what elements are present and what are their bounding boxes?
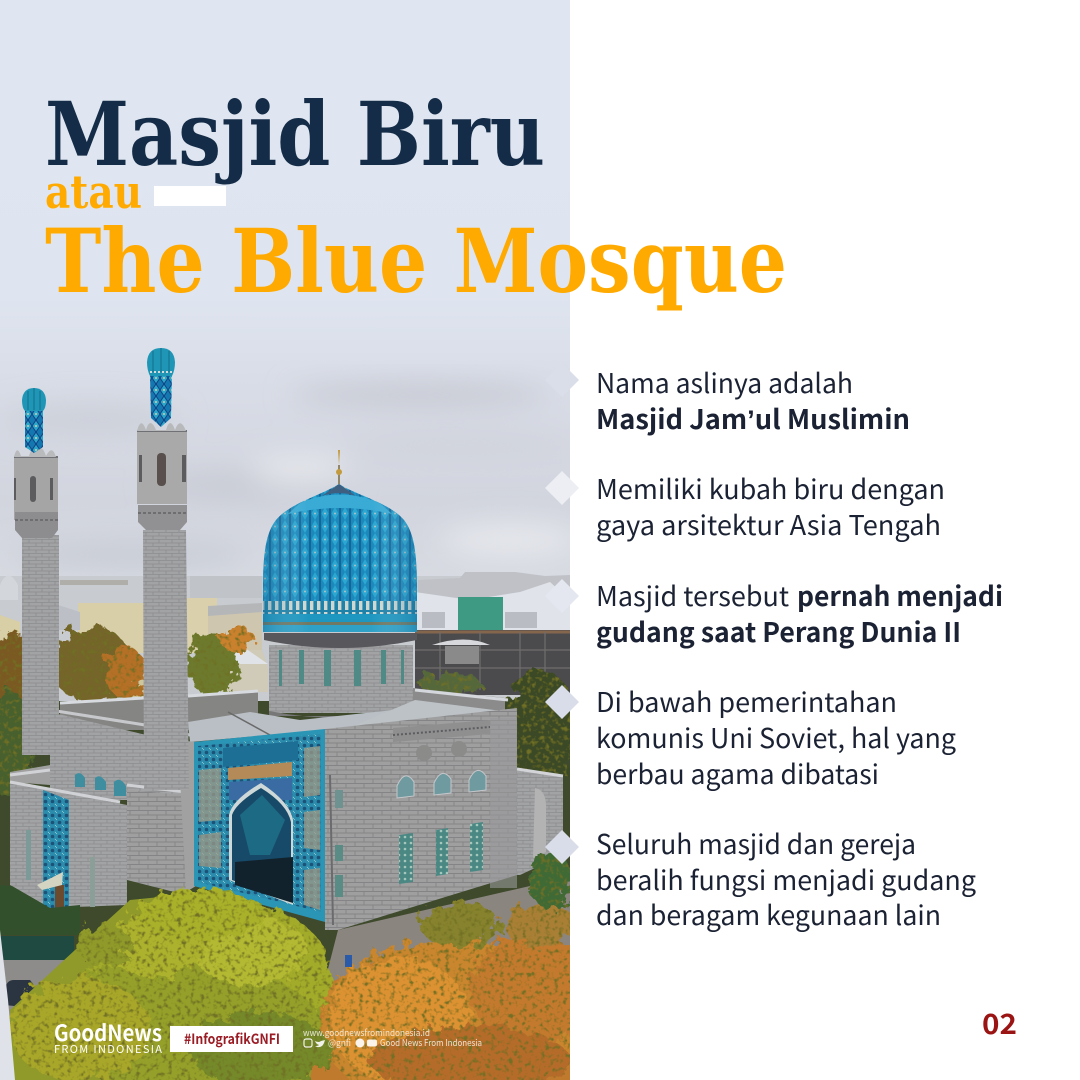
text block: point 3: Masjid tersebut: [596, 575, 789, 614]
right facade: [325, 708, 563, 930]
minaret left: [14, 388, 59, 755]
foliage: yellow-green tree: [10, 889, 332, 1080]
text block: point 1: Nama aslinya adalah: [596, 362, 853, 401]
white highlight block: [154, 186, 226, 206]
left wing of the mosque: [10, 765, 127, 922]
text block: point 2: Memiliki kubah biru dengan: [596, 468, 945, 507]
street light pole: [0, 930, 15, 1080]
text block: point 2: gaya arsitektur Asia Tengah: [596, 504, 941, 543]
hashtag badge: #InfografikGNFI: [184, 1029, 280, 1049]
heading: atau: atau: [45, 165, 142, 219]
text block: point 4: Di bawah pemerintahan: [596, 681, 897, 720]
icon: instagram: [304, 1039, 312, 1047]
dark ground base behind the building: [0, 701, 570, 968]
page number: 02: [982, 1003, 1017, 1043]
text block: point 5: [596, 823, 976, 933]
title: [45, 82, 787, 313]
footer website and social links: www.goodnewsfromindonesia.id: [303, 1026, 430, 1039]
street and pavement: [0, 882, 570, 1022]
back roof of mosque: [60, 688, 508, 730]
footer website and social links: @gnfi: [328, 1036, 351, 1049]
icon: youtube: [367, 1040, 377, 1046]
upper walls and metal roof: [50, 700, 516, 800]
text block: point 3: [596, 575, 1003, 650]
panel: mosque photo: [0, 0, 590, 1080]
footer logo: GoodNews: FROM INDONESIA: [54, 1041, 162, 1057]
tiled main portal: [194, 729, 325, 922]
minaret right: [137, 348, 189, 790]
text block: point 2: [596, 468, 945, 543]
city skyline: [0, 572, 570, 701]
text block: point 4: komunis Uni Soviet, hal yang: [596, 717, 956, 756]
bullet diamonds: [545, 363, 579, 864]
text block: point 1: [596, 362, 910, 437]
text block: point 1: Masjid Jam’ul Muslimin: [596, 398, 910, 437]
foliage: orange tree: [320, 852, 590, 1080]
diamond 2: [545, 471, 579, 505]
hashtag badge: [170, 1026, 293, 1052]
pedestrian sign: [345, 955, 352, 967]
text block: point 4: berbau agama dibatasi: [596, 753, 879, 792]
text block: point 3: pernah menjadi: [797, 575, 1003, 614]
stone tower block: [127, 740, 196, 895]
diamond 4: [545, 685, 579, 719]
icon: facebook: [356, 1038, 364, 1048]
background trees: [0, 627, 578, 800]
text block: point 3: gudang saat Perang Dunia II: [596, 611, 961, 650]
text block: point 4: [596, 681, 956, 792]
diamond 3: [545, 579, 579, 613]
sky: [0, 0, 580, 590]
diamond 5: [545, 830, 579, 864]
heading: Masjid Biru: Masjid Biru: [45, 82, 545, 186]
icon: twitter: [315, 1040, 325, 1047]
footer website and social links: [303, 1026, 482, 1049]
text block: point 5: dan beragam kegunaan lain: [596, 894, 941, 933]
footer website and social links: Good News From Indonesia: [380, 1036, 482, 1049]
foliage: base fill: [10, 890, 570, 1080]
heading: The Blue Mosque: The Blue Mosque: [45, 209, 787, 313]
footer logo: GoodNews: GoodNews: [54, 1016, 162, 1048]
text block: point 5: beralih fungsi menjadi gudang: [596, 859, 976, 898]
diamond 1: [545, 363, 579, 397]
drum under the dome: [269, 645, 413, 718]
blue dome: [260, 450, 420, 648]
text block: point 5: Seluruh masjid dan gereja: [596, 823, 916, 862]
